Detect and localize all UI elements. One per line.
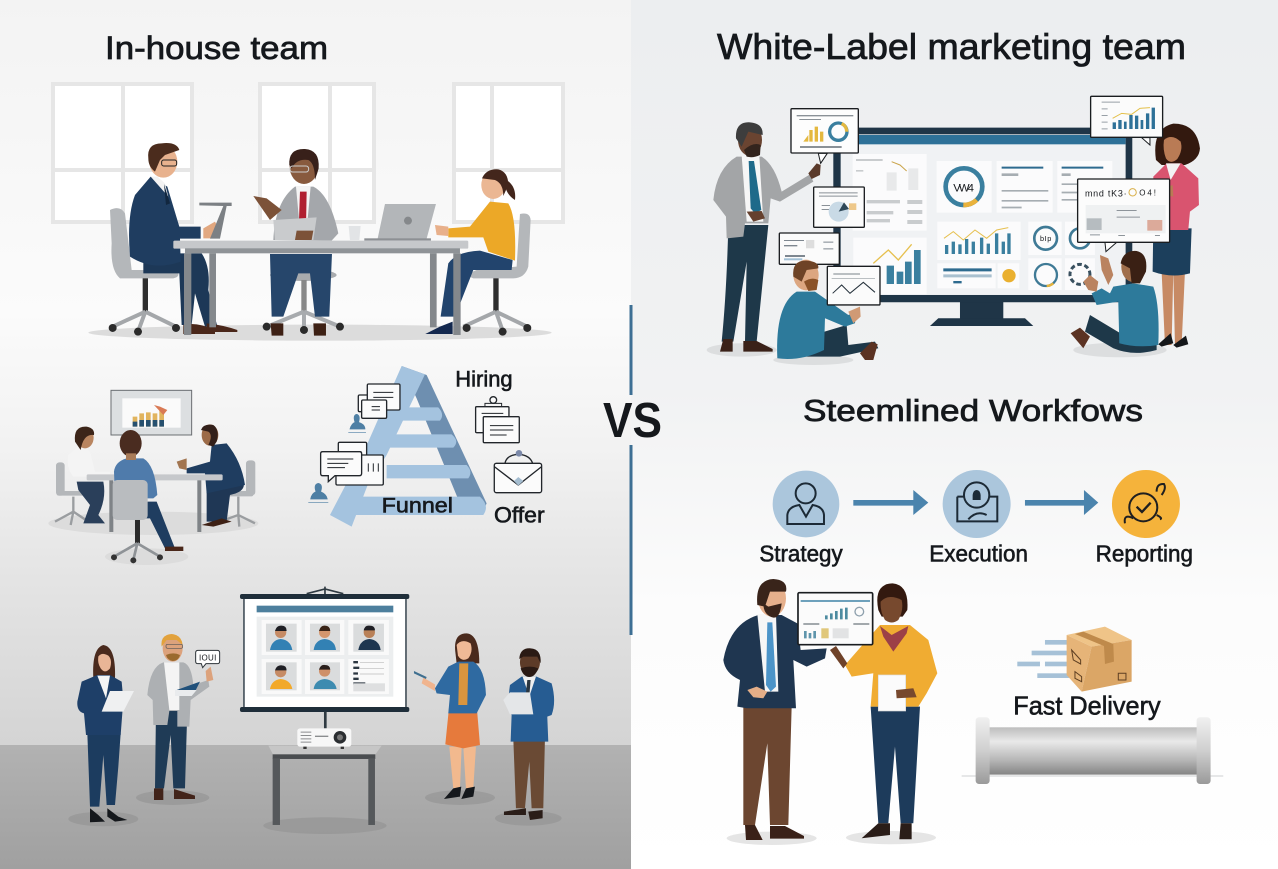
scene: presentation with projector screen (68, 587, 562, 834)
woman in white blouse (68, 427, 110, 523)
hiring documents icon (476, 397, 519, 443)
callout: line and bar chart (1091, 96, 1163, 145)
seated man right (1071, 251, 1159, 353)
panel: white-label background (631, 0, 1278, 869)
man in grey blazer with teal tie (713, 122, 821, 352)
dashboard content (856, 159, 1103, 286)
step icon: strategy (773, 471, 839, 537)
woman in blue blazer, orange skirt (414, 633, 486, 799)
scene: small team meeting (48, 390, 258, 565)
funnel diagram (308, 366, 545, 528)
callout: report list (779, 233, 839, 264)
callout: bar and donut chart (791, 109, 858, 163)
office windows (53, 84, 563, 222)
dashboard content: bIp (1040, 234, 1051, 243)
step label: execution: Execution (929, 541, 1028, 567)
man in navy suit, side on (177, 424, 245, 527)
VS label: VS (603, 394, 662, 448)
woman in yellow sweater (425, 169, 515, 334)
projector screen (240, 587, 409, 728)
arrow: strategy to execution (853, 490, 928, 515)
offer label: Offer (494, 503, 545, 528)
step label: reporting: Reporting (1096, 541, 1193, 567)
man from behind with chair (111, 430, 183, 563)
conference table (173, 241, 468, 335)
streamlined workflows heading: Steemlined Workfows (803, 393, 1143, 428)
scene: meeting table with three colleagues (88, 143, 552, 341)
man in navy suit (129, 143, 237, 334)
document icons, top (358, 384, 400, 418)
candidate icon, top (348, 414, 366, 432)
woman in yellow sweater (830, 583, 937, 839)
step icon: execution (943, 470, 1011, 538)
dashboard content: VW4 (953, 183, 974, 195)
pipe (962, 717, 1223, 784)
fast delivery label: Fast Delivery (1013, 690, 1161, 720)
chair: centre (263, 269, 344, 334)
woman with clipboard (77, 645, 134, 822)
shadows (727, 831, 936, 845)
meeting table (87, 474, 223, 532)
panel: in-house background (0, 0, 631, 869)
speech bubble (196, 650, 220, 668)
offer envelope icon (494, 450, 542, 493)
person in grey suit with red tie (253, 149, 338, 336)
cardboard box (1067, 627, 1132, 692)
step icon: reporting (1112, 470, 1180, 538)
chair: left side (55, 462, 88, 525)
tablet with dashboard (798, 593, 873, 645)
funnel pyramid stripes (330, 366, 487, 527)
speech bubble: IOUI (199, 653, 216, 662)
callout: pie chart (814, 187, 864, 227)
step label: strategy: Strategy (759, 541, 843, 567)
man in grey blazer with laptop (147, 634, 213, 800)
shadows (707, 343, 1167, 365)
tablet (199, 203, 232, 239)
callout: tablet line chart (827, 266, 880, 305)
speed lines (1017, 640, 1069, 678)
VS divider line (630, 305, 632, 635)
scene: handshake over tablet and delivery (723, 579, 1223, 845)
callout: dashboard overlay: O4! (1139, 189, 1156, 198)
laptop (364, 204, 436, 241)
hiring label: Hiring (455, 367, 513, 392)
chair: left (109, 208, 180, 336)
cup (349, 226, 361, 240)
callout: dashboard overlay: mnd tK3· (1085, 189, 1127, 199)
floor shadows (68, 790, 562, 834)
wall screen chart (111, 390, 192, 435)
man in blue blazer (503, 648, 554, 820)
scene: white-label team with dashboard (707, 96, 1200, 365)
dashboard cards (853, 154, 1112, 294)
chat bubble icons, lower (321, 442, 383, 485)
monitor (833, 128, 1132, 326)
man in navy blazer (723, 579, 827, 840)
chair: right side (220, 460, 255, 527)
workflow diagram (759, 470, 1193, 567)
seated man left with tablet (777, 260, 878, 360)
funnel label: Funnel (382, 495, 453, 518)
callout: dashboard overlay (1078, 179, 1170, 252)
chair: right (463, 213, 531, 336)
title: white-label marketing team: White-Label marketing team (717, 26, 1186, 67)
candidate icon, lower (308, 483, 328, 502)
woman in pink cardigan (1153, 124, 1200, 348)
projector on table (268, 728, 382, 825)
arrow: execution to reporting (1025, 490, 1098, 515)
profile tiles (262, 620, 389, 694)
title: in-house team: In-house team (105, 30, 328, 66)
